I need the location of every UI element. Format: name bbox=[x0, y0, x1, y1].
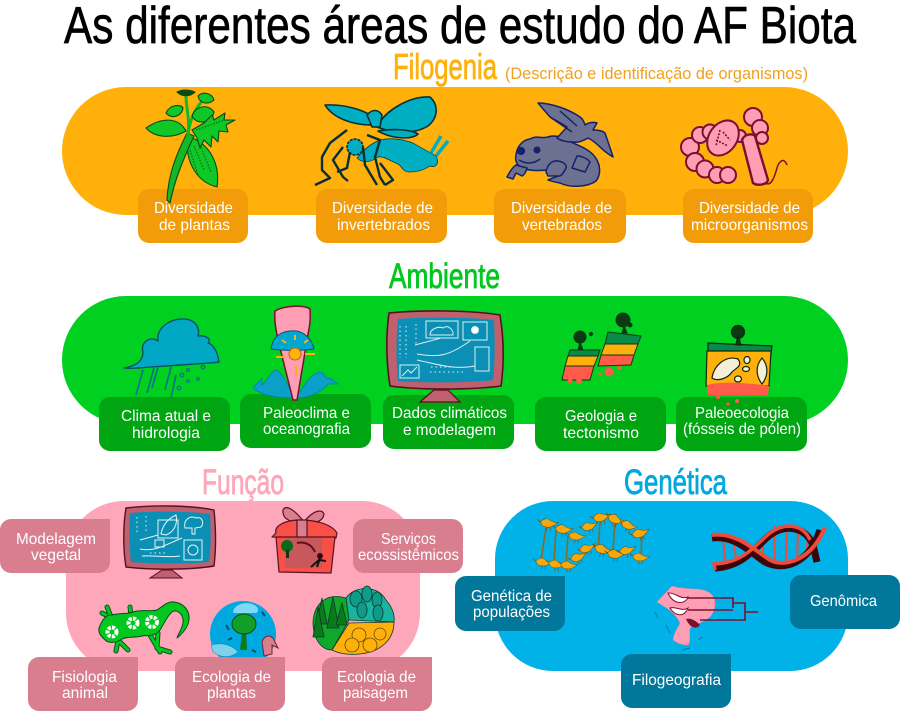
label: Clima atual e hidrologia bbox=[99, 397, 230, 451]
icon: vertebrates bbox=[507, 103, 613, 186]
label: Fisiologia animal bbox=[28, 657, 138, 711]
label: Filogeografia bbox=[621, 654, 731, 708]
label: Paleoecologia (fósseis de pólen): (fósseis de pólen) bbox=[683, 421, 801, 438]
label: Diversidade de microorganismos: microorganismos bbox=[691, 217, 808, 234]
label: Dados climáticos e modelagem: Dados climáticos bbox=[392, 405, 507, 422]
heading: Função: Função bbox=[202, 463, 284, 502]
icon: phylogeography map bbox=[655, 586, 758, 650]
icon: geological blocks bbox=[562, 313, 641, 384]
label: Paleoclima e oceanografia bbox=[240, 394, 371, 448]
heading: Filogenia: Filogenia bbox=[393, 46, 498, 87]
label: Diversidade de plantas: Diversidade bbox=[154, 200, 233, 217]
subtitle: Filogenia description: (Descrição e identificação de organismos) bbox=[505, 64, 808, 83]
panel: Genética bbox=[455, 501, 900, 708]
label: Genômica bbox=[790, 575, 900, 629]
icon: plant modelling monitor bbox=[124, 506, 216, 578]
label: Diversidade de plantas bbox=[138, 189, 248, 243]
icon: DNA double helix bbox=[712, 526, 825, 570]
icon: microorganisms bbox=[681, 108, 787, 185]
label: Genômica: Genômica bbox=[810, 593, 877, 610]
label: Genética de populações bbox=[455, 576, 565, 631]
label: Dados climáticos e modelagem bbox=[383, 395, 514, 449]
panel: Filogenia bbox=[62, 87, 848, 243]
icon: gift box bbox=[272, 508, 337, 573]
label: Diversidade de invertebrados: invertebrados bbox=[337, 217, 430, 234]
label: Paleoclima e oceanografia: Paleoclima e bbox=[263, 405, 350, 422]
label: Diversidade de vertebrados: Diversidade de bbox=[511, 200, 612, 217]
label: Ecologia de plantas bbox=[175, 657, 285, 711]
label: Modelagem vegetal: Modelagem bbox=[16, 531, 96, 548]
label: Ecologia de paisagem: Ecologia de bbox=[337, 669, 416, 686]
label: Ecologia de paisagem: paisagem bbox=[343, 685, 408, 702]
icon: ice core and ocean bbox=[253, 306, 338, 400]
icon: lizard bbox=[99, 602, 189, 652]
label: Diversidade de microorganismos bbox=[683, 189, 813, 243]
label: Paleoclima e oceanografia: oceanografia bbox=[263, 421, 350, 438]
label: Clima atual e hidrologia: Clima atual e bbox=[121, 408, 211, 425]
icon: climate data monitor bbox=[387, 311, 503, 402]
icon: ecology of plants bbox=[210, 601, 278, 667]
label: Fisiologia animal: animal bbox=[62, 685, 108, 702]
label: Geologia e tectonismo: Geologia e bbox=[565, 408, 637, 425]
panel: Função bbox=[0, 501, 463, 711]
icon: plants bbox=[146, 90, 235, 203]
heading: Ambiente: Ambiente bbox=[389, 257, 500, 296]
label: Fisiologia animal: Fisiologia bbox=[52, 669, 117, 686]
icon: bird DNA helix bbox=[533, 510, 652, 572]
label: Paleoecologia (fósseis de pólen): Paleoecologia bbox=[695, 405, 789, 422]
label: Serviços ecossistêmicos bbox=[353, 519, 463, 573]
label: Ecologia de plantas: Ecologia de bbox=[192, 669, 271, 686]
label: Diversidade de vertebrados: vertebrados bbox=[522, 217, 602, 234]
label: Dados climáticos e modelagem: e modelagem bbox=[403, 422, 496, 439]
label: Ecologia de paisagem bbox=[322, 657, 432, 711]
label: Genética de populações: Genética de bbox=[471, 588, 552, 605]
icon: rain cloud bbox=[124, 319, 219, 398]
label: Serviços ecossistêmicos: ecossistêmicos bbox=[358, 547, 459, 564]
label: Clima atual e hidrologia: hidrologia bbox=[132, 425, 200, 442]
label: Diversidade de vertebrados bbox=[494, 189, 626, 243]
label: Filogeografia: Filogeografia bbox=[632, 672, 721, 689]
label: Diversidade de plantas: de plantas bbox=[159, 217, 230, 234]
label: Serviços ecossistêmicos: Serviços bbox=[381, 531, 436, 548]
icon: fossil strata bbox=[706, 326, 772, 406]
label: Geologia e tectonismo bbox=[535, 397, 666, 451]
label: Modelagem vegetal: vegetal bbox=[31, 547, 81, 564]
icon: landscape bbox=[313, 586, 394, 654]
heading: Genética: Genética bbox=[624, 463, 727, 502]
label: Diversidade de microorganismos: Diversidade de bbox=[699, 200, 800, 217]
label: Geologia e tectonismo: tectonismo bbox=[563, 425, 639, 442]
label: Diversidade de invertebrados: Diversidade de bbox=[332, 200, 433, 217]
label: Paleoecologia (fósseis de pólen) bbox=[676, 397, 807, 451]
label: Modelagem vegetal bbox=[0, 519, 110, 573]
panel: Ambiente bbox=[62, 296, 848, 451]
label: Genética de populações: populações bbox=[473, 604, 550, 621]
label: Ecologia de plantas: plantas bbox=[207, 685, 256, 702]
label: Diversidade de invertebrados bbox=[316, 189, 447, 243]
icon: mosquito bbox=[315, 97, 448, 185]
